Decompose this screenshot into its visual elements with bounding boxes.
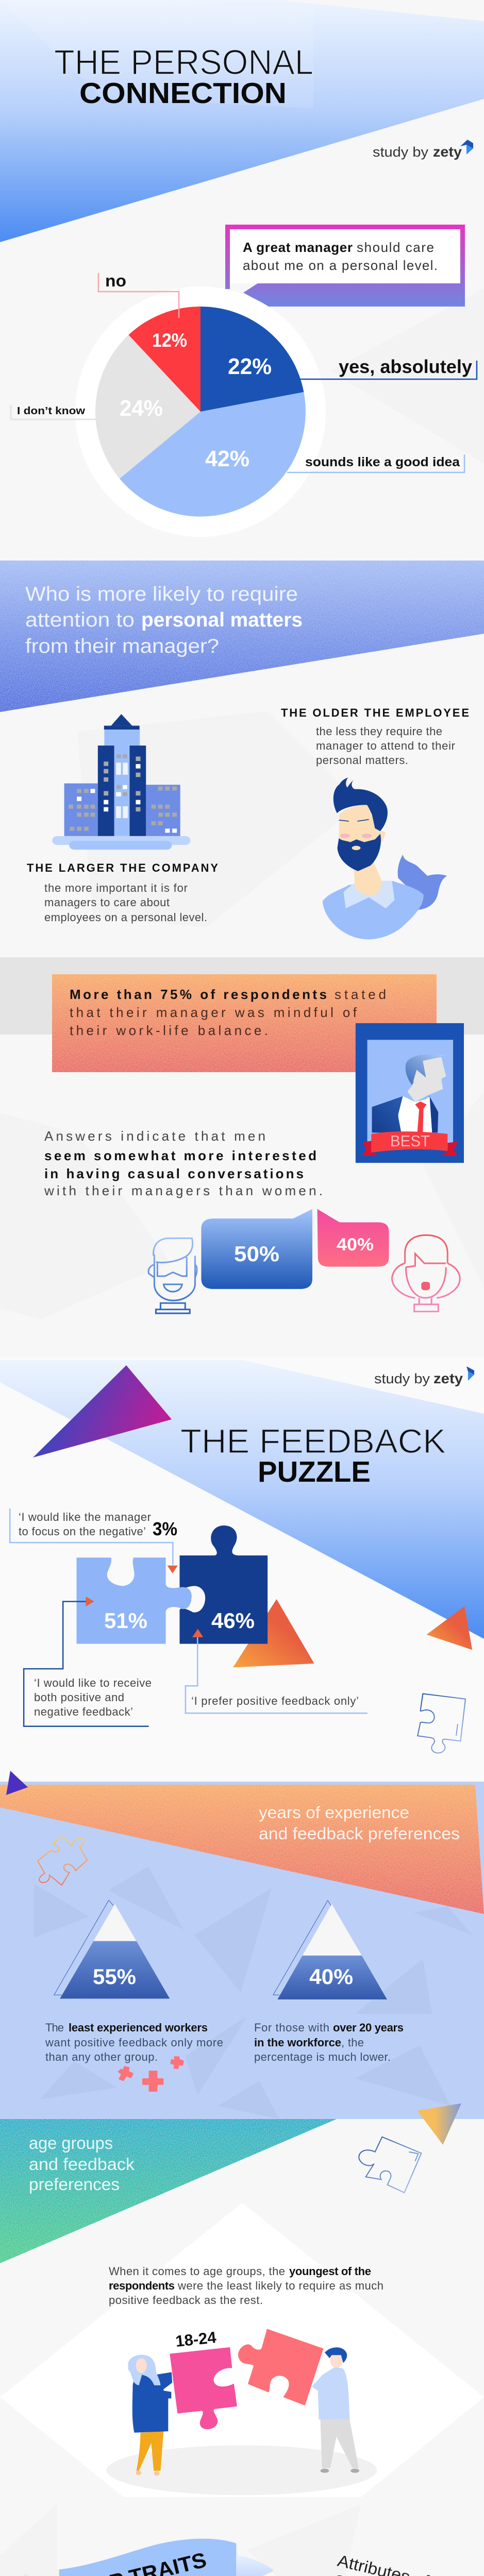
white ring xyxy=(75,286,326,537)
heading xyxy=(259,1803,460,1843)
study by zety logo: zety xyxy=(433,1370,463,1386)
text: youngest respondents: positive feedback as the rest. xyxy=(109,2294,263,2307)
callout lines and arrows xyxy=(10,1509,368,1726)
chart: 40% mountain: 40% xyxy=(309,1964,353,1989)
label: I don't know: I don’t know xyxy=(17,405,85,417)
purple triangle xyxy=(6,1771,28,1795)
text: the older the employee: manager to attend to their xyxy=(316,739,455,752)
text: youngest respondents xyxy=(109,2265,383,2307)
chart: 40% mountain xyxy=(273,1901,387,1999)
text: answers indicate xyxy=(44,1128,323,1198)
section background xyxy=(0,1357,484,1784)
heading: personal matters xyxy=(141,609,303,631)
illustration: people with puzzle xyxy=(107,2329,377,2495)
text: both positive and negative: both positive and xyxy=(34,1691,124,1704)
badge text: BEST xyxy=(390,1132,430,1150)
text: the older the employee: personal matters. xyxy=(316,754,408,767)
icon: woman outline xyxy=(392,1235,460,1312)
text: over 20 years: For those with xyxy=(254,2021,329,2034)
text: over 20 years: percentage is much lower. xyxy=(254,2050,391,2063)
callout: great manager: about me on a personal level. xyxy=(243,258,438,273)
pie chart xyxy=(95,307,306,517)
yellow triangle xyxy=(418,2103,461,2145)
orange slanted header xyxy=(0,1785,484,1914)
text: least experienced workers: than any other group. xyxy=(45,2050,158,2063)
icon: buildings xyxy=(52,714,190,850)
callout: great manager xyxy=(225,225,465,307)
puzzle pieces xyxy=(77,1526,268,1644)
label: I don't know xyxy=(11,405,96,419)
title: CONNECTION xyxy=(79,77,287,110)
teal slanted header xyxy=(0,2119,337,2263)
text: the larger the company: employees on a personal level. xyxy=(44,911,207,924)
label: yes, absolutely: yes, absolutely xyxy=(339,356,472,377)
text: the older the employee xyxy=(281,706,469,767)
text: the larger the company: THE LARGER THE COMPANY xyxy=(27,861,218,874)
text: youngest respondents: youngest of the xyxy=(289,2265,371,2278)
callout text: stated xyxy=(335,987,386,1002)
pie chart: 24% xyxy=(120,396,163,421)
pie chart: 22% xyxy=(228,354,272,379)
title xyxy=(54,43,313,110)
panel: feedback puzzle xyxy=(0,1357,484,1784)
text: over 20 years xyxy=(254,2021,404,2063)
puzzle percentages: 51% xyxy=(104,1608,147,1633)
text: over 20 years: , the xyxy=(341,2036,364,2049)
callout text: that their manager was mindful of xyxy=(70,1005,357,1020)
text: focus on the negative: 3% xyxy=(153,1518,177,1539)
panel: work-life balance xyxy=(44,974,464,1313)
callout text: More than 75% of respondents xyxy=(70,987,327,1002)
text: youngest respondents: were the least likely to require as much xyxy=(177,2279,383,2292)
text: the larger the company: the more important it is for xyxy=(44,882,188,894)
chart: 55% mountain: 55% xyxy=(93,1964,136,1989)
text: answers indicate: seem somewhat more interested xyxy=(44,1148,316,1163)
label: sounds like a good idea: sounds like a good idea xyxy=(305,455,460,469)
title: PUZZLE xyxy=(258,1455,371,1488)
text: both positive and negative: ‘I would like to receive xyxy=(34,1676,152,1689)
study by zety logo: study by xyxy=(374,1371,430,1386)
callout: great manager: should care xyxy=(357,240,434,255)
pie chart: 42% xyxy=(205,446,249,471)
heading: from their manager? xyxy=(25,635,219,657)
text: answers indicate: Answers indicate that men xyxy=(44,1128,265,1144)
panel: top traits heading xyxy=(23,2539,453,2576)
ribbon: top traits xyxy=(23,2539,273,2576)
label: yes, absolutely xyxy=(282,356,477,379)
text: over 20 years: over 20 years xyxy=(333,2021,404,2034)
text: the larger the company xyxy=(27,861,218,924)
heading: and feedback xyxy=(29,2155,135,2174)
text: both positive and negative xyxy=(34,1676,152,1718)
chart: 55% mountain xyxy=(54,1901,170,1998)
study by zety logo: zety xyxy=(433,144,462,160)
callout: great manager: A great manager xyxy=(243,240,353,255)
faint triangles xyxy=(34,1867,472,2119)
speech bubbles: 40% xyxy=(337,1235,374,1255)
label: no xyxy=(98,272,179,318)
text: the older the employee: the less they require the xyxy=(316,725,442,738)
text: answers indicate: in having casual conversations xyxy=(44,1166,304,1181)
title: THE FEEDBACK xyxy=(180,1422,446,1460)
text: least experienced workers: least experienced workers xyxy=(69,2021,208,2034)
label: 18-24: 18-24 xyxy=(175,2328,218,2350)
text: the larger the company: managers to care about xyxy=(44,896,170,909)
label: sounds like a good idea xyxy=(287,454,464,472)
heading xyxy=(25,583,303,657)
panel: who requires attention xyxy=(0,561,484,939)
callout text xyxy=(70,987,386,1038)
illustration: bearded man xyxy=(323,777,447,939)
icon: man outline xyxy=(148,1238,197,1313)
orange triangles xyxy=(233,1599,472,1668)
purple triangle xyxy=(33,1365,172,1458)
heading: preferences xyxy=(29,2175,120,2194)
panel: age groups xyxy=(0,2103,484,2497)
icon: outline puzzle piece xyxy=(418,1694,465,1753)
study by zety logo: study by xyxy=(373,144,429,160)
panel: personal connection hero xyxy=(0,0,484,242)
text: answers indicate: with their managers than women. xyxy=(44,1183,323,1198)
text: youngest respondents: When it comes to age groups, the xyxy=(109,2265,285,2278)
title xyxy=(180,1422,446,1488)
text: least experienced workers: want positive feedback only more xyxy=(45,2036,223,2049)
hero gradient shape xyxy=(0,0,484,242)
text: youngest respondents: respondents xyxy=(109,2279,175,2292)
text: both positive and negative: negative feedback’ xyxy=(34,1705,133,1718)
icon: outline puzzle piece xyxy=(38,1837,87,1885)
puzzle percentages xyxy=(104,1608,255,1633)
panel: years of experience xyxy=(0,1771,484,2119)
icon: outline puzzle piece xyxy=(359,2137,421,2193)
heading: attention to xyxy=(25,609,135,631)
icon: red crosses xyxy=(118,2056,184,2092)
puzzle percentages: 46% xyxy=(211,1608,255,1633)
text: least experienced workers: The xyxy=(45,2021,64,2034)
orange callout xyxy=(52,974,437,1072)
pie chart: 12% xyxy=(152,330,187,351)
heading: Who is more likely to require xyxy=(25,583,298,605)
blue slanted band xyxy=(0,561,484,712)
title: THE PERSONAL xyxy=(54,43,313,82)
study by zety logo xyxy=(374,1366,474,1386)
white diamond xyxy=(0,2202,484,2497)
heading xyxy=(29,2133,135,2194)
speech bubbles xyxy=(201,1209,389,1289)
text: positive feedback only: ‘I prefer positive feedback only’ xyxy=(191,1694,359,1707)
speech bubbles: 50% xyxy=(234,1242,279,1266)
light blue background xyxy=(0,1782,484,2119)
heading: and feedback preferences xyxy=(259,1824,460,1843)
hero gradient shape xyxy=(0,1360,484,1639)
heading: age groups xyxy=(29,2133,113,2153)
text: focus on the negative: ‘I would like the manager xyxy=(19,1511,151,1523)
icon: best manager portrait xyxy=(356,1023,464,1163)
text: the older the employee: THE OLDER THE EMPLOYEE xyxy=(281,706,469,719)
panel: grey band xyxy=(0,957,484,1035)
callout text: their work-life balance. xyxy=(70,1023,268,1038)
study by zety logo xyxy=(373,140,473,160)
label: no: no xyxy=(105,272,126,290)
text: least experienced workers xyxy=(45,2021,223,2063)
text: focus on the negative xyxy=(19,1511,177,1539)
panel: pie chart survey xyxy=(11,225,477,537)
text: focus on the negative: to focus on the negative’ xyxy=(19,1525,146,1538)
heading: years of experience xyxy=(259,1803,409,1822)
text: over 20 years: in the workforce xyxy=(254,2036,341,2049)
